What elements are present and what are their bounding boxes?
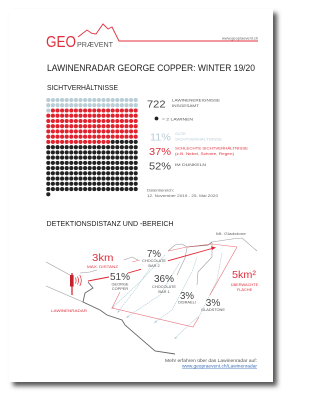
dark rock lines — [83, 242, 212, 354]
legend: dot = 2 avalanches — [155, 116, 193, 121]
label: Chocolate Bar 1 36%: 36% — [154, 273, 174, 285]
radar detection arrows — [88, 248, 212, 281]
label: Chocolate Bar 2 7%: 7% — [147, 248, 161, 260]
stat: poor visibility: 37% — [149, 146, 171, 158]
heading: detection distance: DETEKTIONSDISTANZ UND -BEREICH — [46, 221, 174, 228]
title: LAWINENRADAR GEORGE COPPER: WINTER 19/20 — [47, 63, 255, 73]
page shadow — [13, 13, 277, 386]
monitored area outline — [112, 244, 237, 327]
label: George Copper 51%: 51% — [110, 271, 130, 283]
stat: good visibility — [150, 131, 222, 144]
label: George Copper 51%: COPPER — [112, 286, 128, 291]
stat: good visibility: SICHTVERHÄLTNISSE — [175, 136, 222, 142]
label: George Copper 51%: GEORGE — [111, 282, 129, 286]
stat: darkness: IM DUNKELN — [175, 162, 206, 167]
stat: total avalanches: LAWINENEREIGNISSE — [172, 98, 220, 102]
logo: Geopraevent — [46, 24, 258, 51]
label: Chocolate Bar 2 7%: CHOCOLATE — [142, 258, 166, 263]
stat: poor visibility — [149, 146, 248, 158]
stat: good visibility: GUTE — [175, 131, 186, 136]
footer text and link: www.geopraevent.ch/Lawinenradar — [182, 364, 258, 368]
heading: Sichtverhältnisse: SICHTVERHÄLTNISSE — [47, 84, 118, 92]
stat: good visibility: 11% — [150, 132, 171, 144]
label: Chocolate Bar 2 7%: BAR 2 — [148, 263, 160, 268]
data range note — [147, 188, 219, 198]
label: Lawinenradar: LAWINENRADAR — [51, 308, 87, 313]
icon: radar — [70, 273, 81, 295]
label: George Copper 51% — [110, 271, 130, 291]
label: 3km max distance: MAX. DISTANZ — [87, 264, 119, 269]
label: 5 km2 monitored area: 5km² — [232, 269, 257, 281]
stat: darkness — [149, 160, 206, 172]
label: Gladstone 3%: 3% — [206, 297, 220, 309]
legend: dot = 2 avalanches: = 2 LAWINEN — [162, 116, 193, 121]
stat: total avalanches: 722 — [147, 98, 166, 110]
label: 3km max distance — [87, 252, 119, 269]
data range note: Datenbereich: — [147, 188, 174, 192]
label: 3km max distance: 3km — [92, 252, 114, 264]
label: Disraeli 3%: DISRAELI — [178, 300, 196, 304]
label: Disraeli 3%: 3% — [180, 290, 194, 302]
footer text and link — [165, 358, 258, 368]
stat: poor visibility: SCHLECHTE SICHTVERHÄLTNISSE — [175, 146, 248, 150]
page sheet — [9, 9, 273, 382]
stat: total avalanches: INSGESAMT — [172, 103, 200, 108]
label: Gladstone 3%: GLADSTONE — [201, 307, 225, 312]
logo: Geopraevent: GEO — [46, 34, 76, 51]
label: Mt. Gladstone: Mt. Gladstone — [216, 231, 246, 236]
label: 5 km2 monitored area: ÜBERWACHTE — [231, 282, 259, 287]
track arrowheads — [111, 306, 177, 339]
label: Gladstone 3% — [201, 297, 225, 312]
logo: Geopraevent: PRÆVENT — [77, 42, 114, 49]
map: detection range — [46, 238, 257, 354]
stat: total avalanches — [147, 98, 220, 110]
label: 5 km2 monitored area — [231, 269, 259, 292]
stat: darkness: 52% — [149, 160, 171, 172]
footer text and link: Mehr erfahren über das Lawinenradar auf: — [165, 358, 257, 363]
label: Chocolate Bar 1 36% — [152, 273, 176, 294]
terrain ridges — [46, 238, 257, 302]
label: Chocolate Bar 2 7% — [142, 248, 166, 268]
dot chart: avalanches by visibility — [48, 100, 136, 194]
label: 5 km2 monitored area: FLÄCHE — [237, 287, 253, 292]
label: Chocolate Bar 1 36%: BAR 1 — [158, 289, 170, 294]
stat: poor visibility: (z.B. Nebel, Schnee, Regen) — [175, 151, 235, 156]
data range note: 12. November 2019 - 25. Mai 2020 — [147, 193, 219, 198]
label: Chocolate Bar 1 36%: CHOCOLATE — [152, 284, 176, 289]
website url: www.geopraevent.ch — [222, 36, 258, 40]
avalanche tracks — [112, 253, 222, 338]
